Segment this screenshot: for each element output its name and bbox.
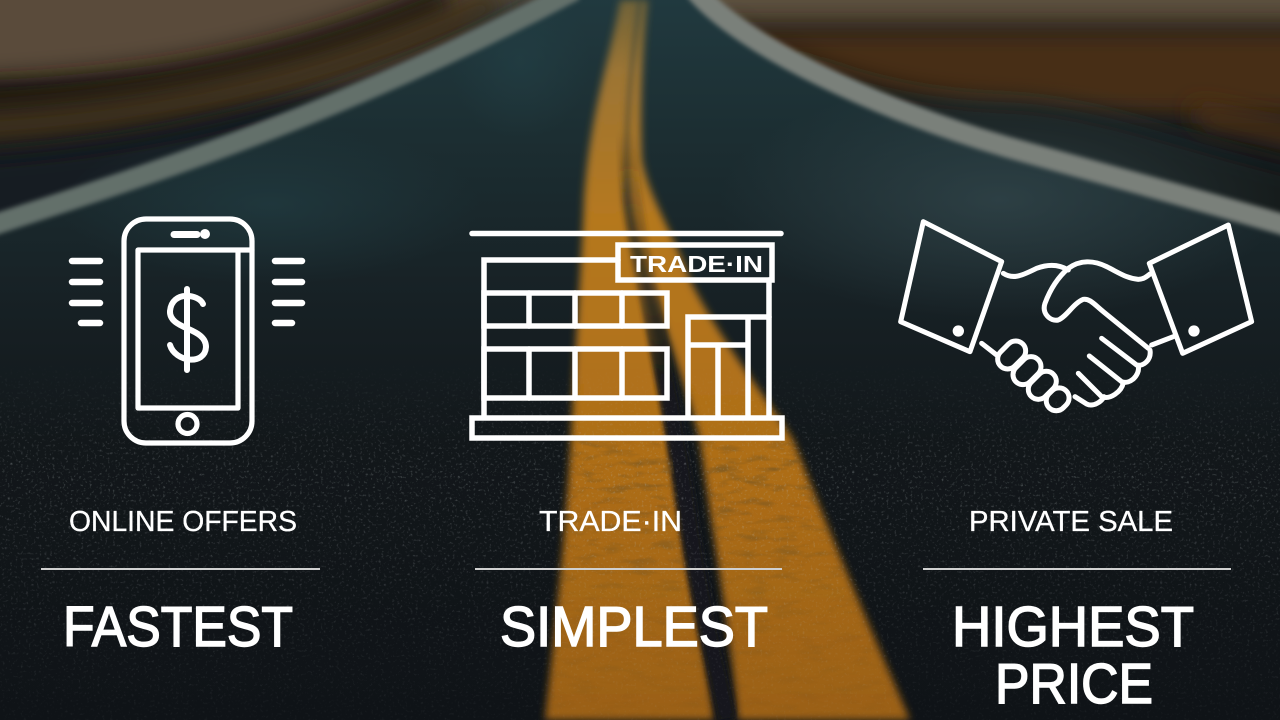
icon: smartphone with dollar sign xyxy=(72,219,302,443)
label: private sale: PRIVATE SALE xyxy=(969,506,1173,538)
heading: highest price xyxy=(952,595,1194,716)
column: trade-in xyxy=(475,506,782,659)
store sign text: TRADE·IN xyxy=(630,251,763,277)
heading: highest price: HIGHEST xyxy=(952,595,1194,659)
heading: highest price: PRICE xyxy=(995,652,1153,716)
icon: trade-in storefront xyxy=(472,234,782,438)
column: private sale xyxy=(923,506,1231,716)
column: online offers xyxy=(41,506,320,659)
heading: fastest: FASTEST xyxy=(63,595,293,659)
label: trade-in: TRADE·IN xyxy=(539,506,682,538)
heading: simplest: SIMPLEST xyxy=(500,595,768,659)
label: online offers: ONLINE OFFERS xyxy=(69,506,297,538)
icon: handshake with cuffs xyxy=(901,222,1252,415)
